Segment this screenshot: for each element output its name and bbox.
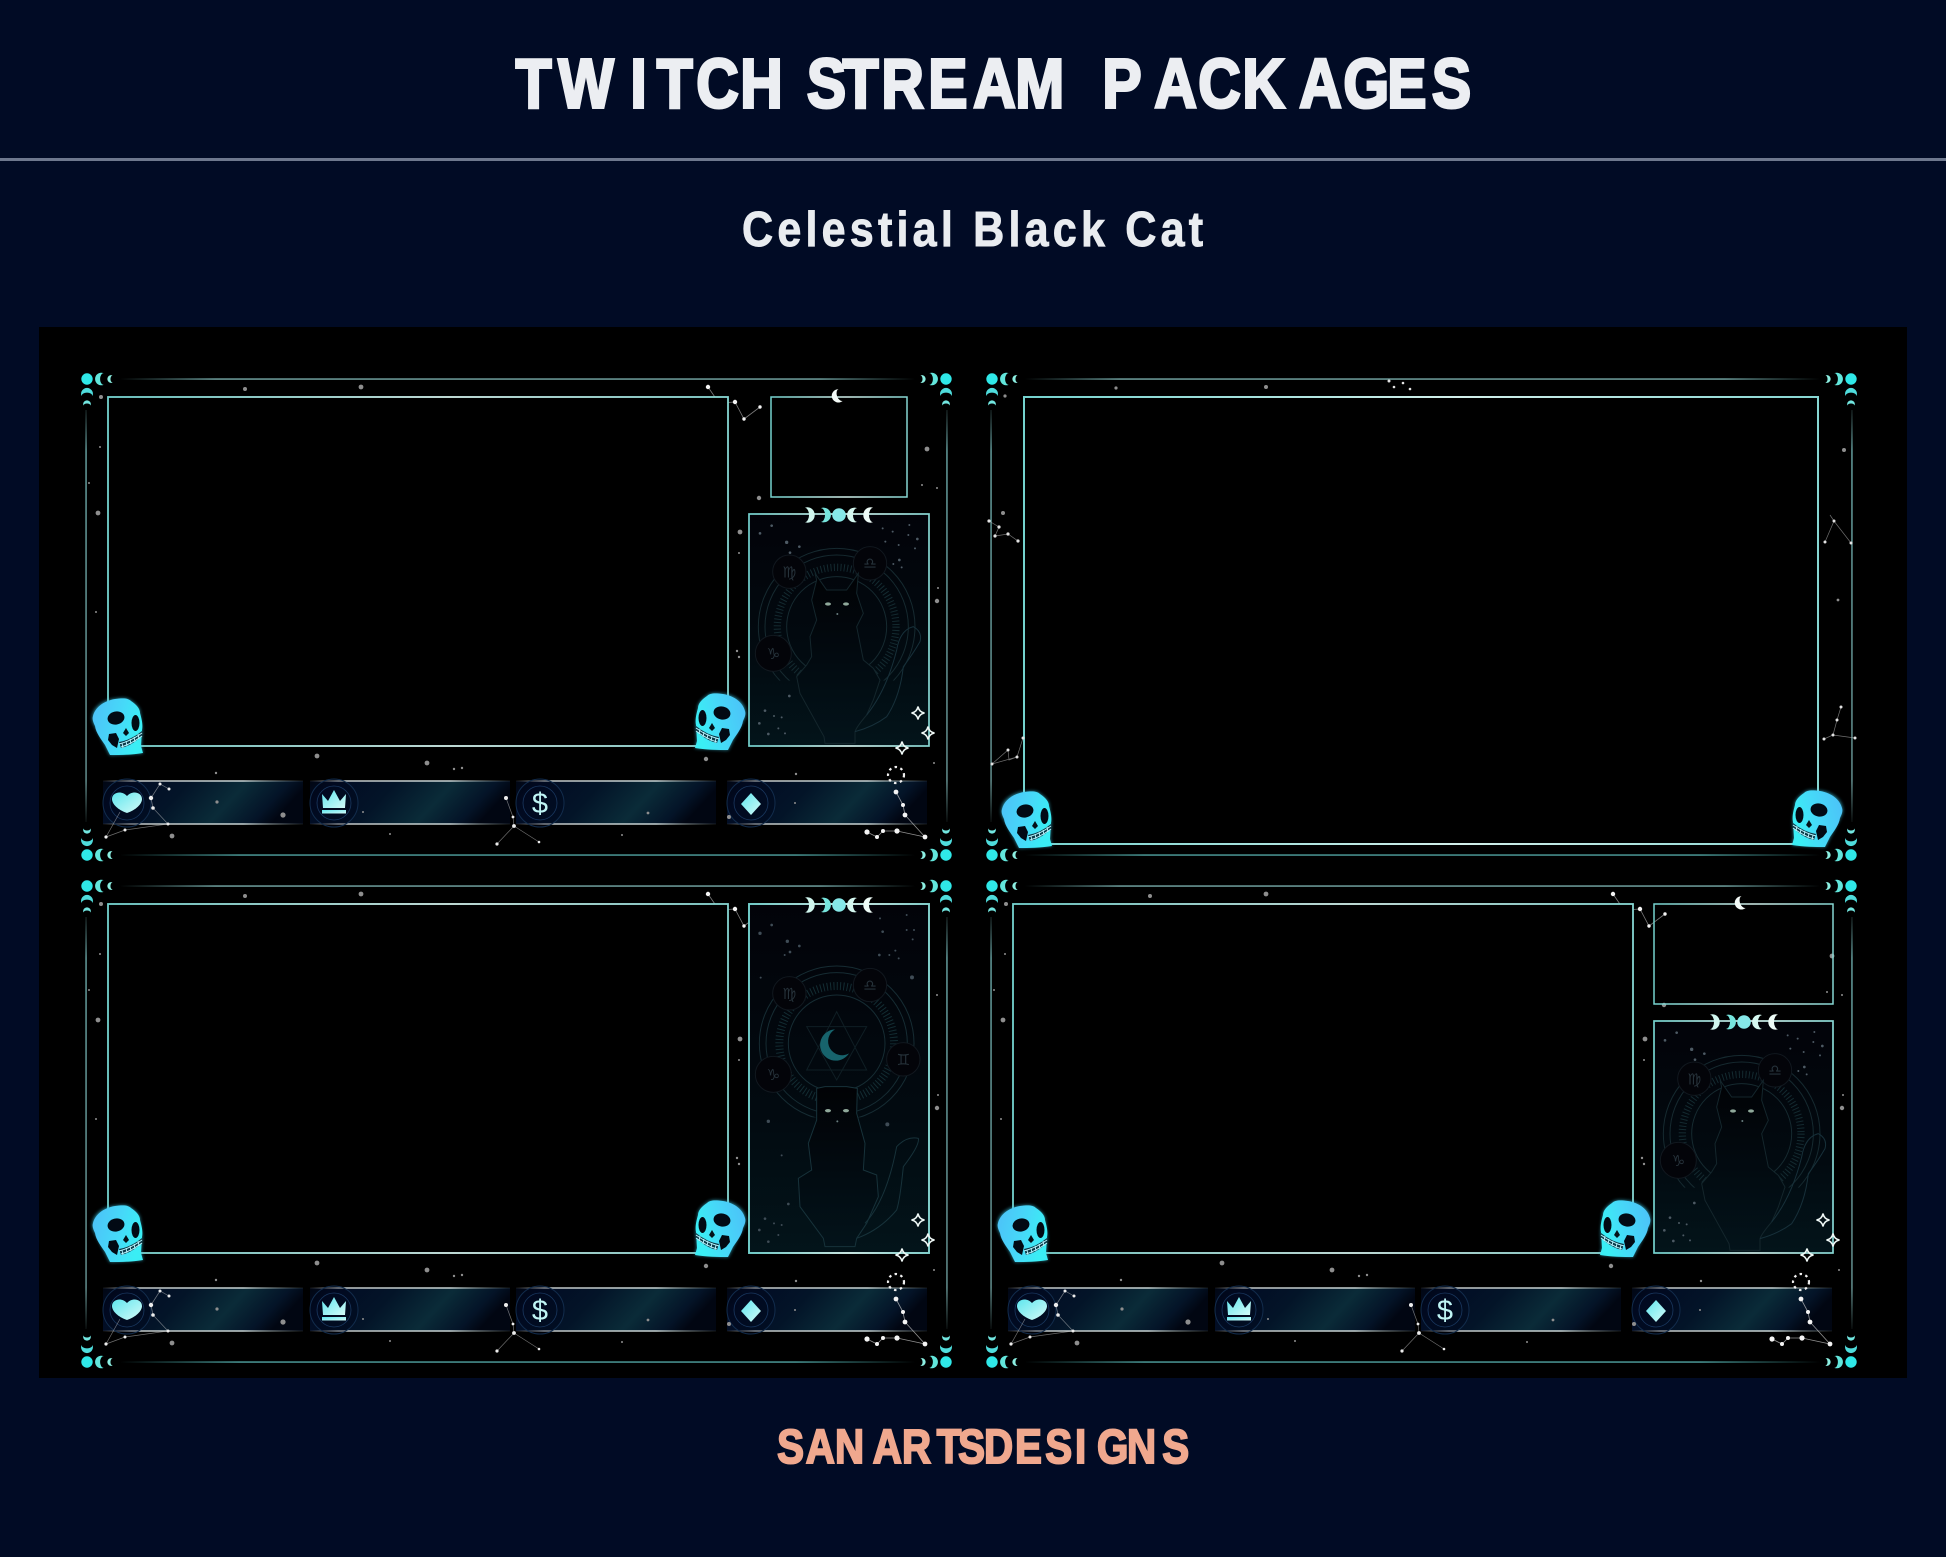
footer brand name: SANARTSDESIGNS: [777, 1421, 1189, 1474]
subtitle: Celestial Black Cat: [742, 201, 1203, 257]
header divider: [0, 158, 1946, 161]
overlay frame: top-left layout: [81, 373, 952, 861]
overlay frame: top-right layout: [986, 373, 1857, 861]
overlay frame: bottom-left layout: [81, 880, 952, 1368]
overlay frame: bottom-right layout: [986, 880, 1857, 1368]
title: TWITCH STREAM PACKAGES: [516, 44, 1471, 123]
panel: overlay preview board: [39, 327, 1907, 1378]
